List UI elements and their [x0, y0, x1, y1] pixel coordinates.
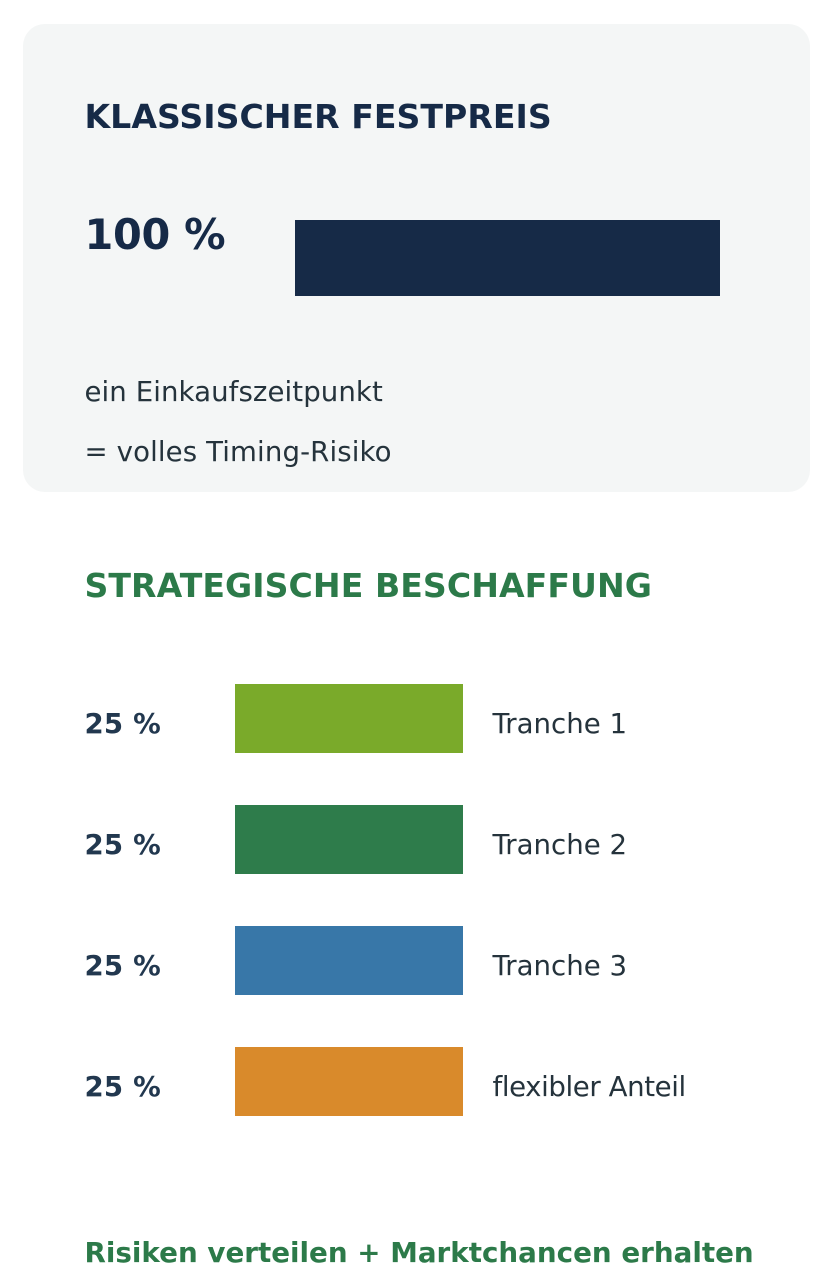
- value: 100 %: 100 %: [84, 211, 225, 259]
- bar: 100 %: [295, 220, 720, 296]
- label: tranche 2: Tranche 2: [492, 828, 627, 861]
- text: full timing risk: = volles Timing-Risiko: [84, 435, 392, 468]
- row: tranche 2: [84, 805, 627, 874]
- bar: flexible share: [235, 1047, 463, 1116]
- label: tranche 1: Tranche 1: [492, 707, 627, 740]
- row: tranche 1: [84, 684, 627, 753]
- label: flexible share: flexibler Anteil: [492, 1070, 686, 1103]
- value: flexible share: 25 %: [84, 1070, 161, 1103]
- panel: classic fixed price: [23, 24, 810, 492]
- conclusion: Risiken verteilen + Marktchancen erhalten: [84, 1236, 754, 1269]
- bar: tranche 3: [235, 926, 463, 995]
- heading: Klassischer Festpreis: KLASSISCHER FESTPREIS: [84, 97, 552, 136]
- value: tranche 1: 25 %: [84, 707, 161, 740]
- row: flexible share: [84, 1047, 686, 1116]
- text: one purchase time: ein Einkaufszeitpunkt: [84, 375, 383, 408]
- bar: tranche 2: [235, 805, 463, 874]
- row: tranche 3: [84, 926, 627, 995]
- label: tranche 3: Tranche 3: [492, 949, 627, 982]
- bar: tranche 1: [235, 684, 463, 753]
- value: tranche 2: 25 %: [84, 828, 161, 861]
- heading: Strategische Beschaffung: STRATEGISCHE BESCHAFFUNG: [84, 566, 652, 605]
- value: tranche 3: 25 %: [84, 949, 161, 982]
